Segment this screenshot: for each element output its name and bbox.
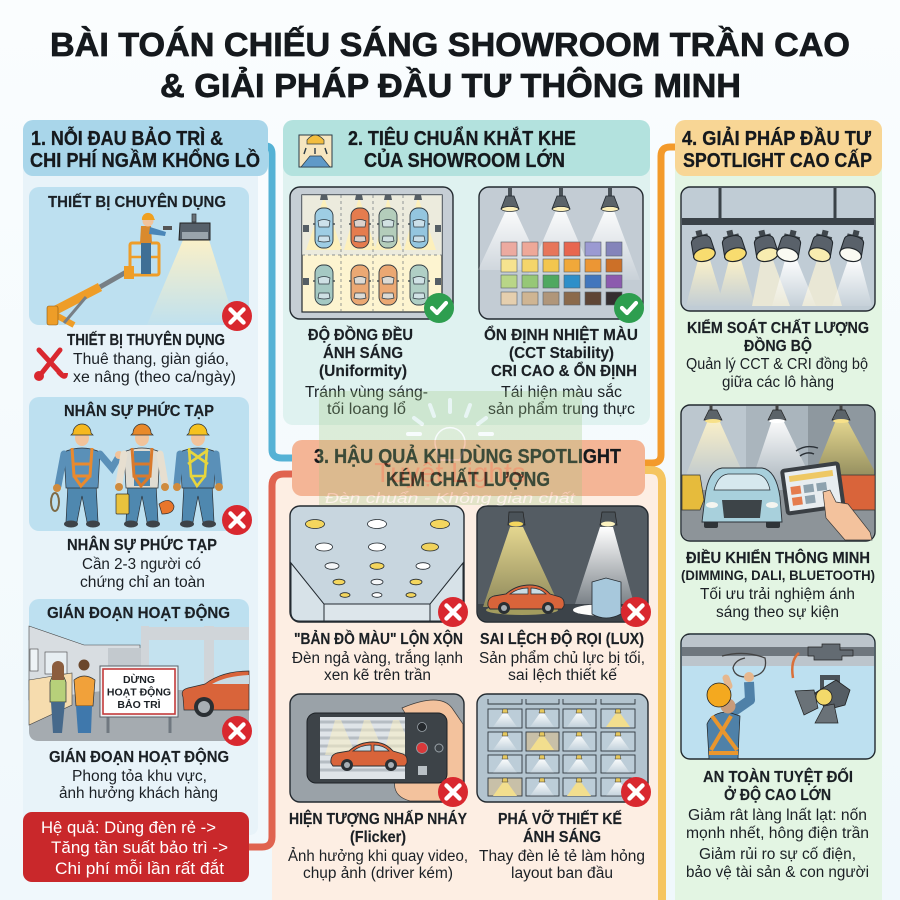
worker 3 (173, 424, 223, 528)
text: broken layout (479, 810, 645, 882)
text: colour stability: sản phẩm trung thực (488, 401, 635, 418)
worker 2 (115, 424, 174, 528)
text: broken layout: Thay đèn lẻ tẻ làm hỏng (479, 848, 645, 865)
panel 2 header (283, 120, 650, 176)
callout: consequence box (23, 812, 249, 882)
text: smart control: ĐIỀU KHIỂN THÔNG MINH (686, 549, 870, 567)
text: uniformity: tối loang lổ (327, 401, 406, 418)
watermark: Đèn chuẩn - Không gian chất (325, 490, 576, 507)
text: lux deviation: sai lệch thiết kế (508, 667, 617, 684)
panel 3 header: 3. HẬU QUẢ KHI DÙNG SPOTLIGHT (314, 444, 621, 468)
text: colour stability (484, 326, 638, 418)
title: & GIẢI PHÁP ĐẦU TƯ THÔNG MINH (160, 66, 741, 104)
text: uniformity (305, 326, 428, 418)
image: synchronised track spotlights (681, 187, 875, 311)
text: smart control: sáng theo sự kiện (716, 604, 839, 621)
panel 3 body with connector lines (249, 440, 662, 900)
image: mixed ceiling colours (290, 506, 468, 627)
image: lux deviation (477, 506, 651, 627)
badge: cross (621, 597, 651, 627)
panel 3 header (292, 440, 645, 496)
card: personnel illustration (29, 397, 252, 535)
panel 1 header (23, 120, 268, 176)
text: colour stability: (CCT Stability) (509, 345, 614, 362)
text: flicker: chụp ảnh (driver kém) (303, 865, 453, 882)
image: uniformity floor plan (290, 187, 454, 323)
text: personnel: Cần 2-3 người có (82, 556, 201, 573)
text: safety (686, 768, 869, 881)
text: disruption: GIÁN ĐOẠN HOẠT ĐỘNG (49, 748, 229, 766)
text: safety: Giảm rât làng lnất lạt: nốn (688, 807, 867, 824)
badge: cross (438, 597, 468, 627)
text: flicker: Ảnh hưởng khi quay video, (288, 848, 468, 865)
connector: panel 1 to panel 3 (blue) (262, 146, 296, 458)
callout: consequence box: Hệ quả: Dùng đèn rẻ -> (41, 818, 216, 837)
text: flicker: (Flicker) (350, 829, 406, 846)
text: personnel (67, 536, 217, 591)
connector: panel 3 to panel 4 (orange) (640, 147, 678, 463)
text: safety: Giảm rủi ro sự cố điện, (699, 846, 856, 863)
panel 2 header: CỦA SHOWROOM LỚN (364, 148, 565, 172)
panel 2 header: 2. TIÊU CHUẨN KHẮT KHE (348, 126, 576, 150)
text: flicker: HIỆN TƯỢNG NHẤP NHÁY (289, 810, 468, 828)
card: disruption illustration: DỪNG (123, 673, 155, 686)
text: disruption (49, 748, 229, 802)
badge: cross (438, 777, 468, 807)
text: mixed ceiling (292, 630, 463, 684)
image: broken lighting layout grid (477, 694, 651, 807)
badge: cross (222, 716, 252, 746)
text: safety: AN TOÀN TUYỆT ĐỐI (703, 768, 853, 786)
text: broken layout: PHÁ VỠ THIẾT KẾ (498, 810, 622, 828)
text: smart control (681, 549, 875, 621)
panel 4: premium spotlight solution (675, 120, 882, 900)
card: specialised equipment illustration: THIẾT BỊ CHUYÊN DỤNG (48, 193, 226, 211)
watermark (319, 391, 582, 507)
text: quality control: giữa các lô hàng (722, 374, 834, 391)
text: lux deviation: SAI LỆCH ĐỘ RỌI (LUX) (480, 630, 644, 648)
text: uniformity: (Uniformity) (319, 363, 407, 380)
worker 1 (51, 424, 123, 528)
title (50, 26, 850, 104)
text: equipment: Thuê thang, giàn giáo, (73, 351, 229, 368)
text: quality control: KIỂM SOÁT CHẤT LƯỢNG (687, 319, 869, 337)
panel 1: hidden costs (23, 120, 268, 835)
image: smart control with tablet (681, 405, 875, 541)
text: broken layout: layout ban đầu (511, 865, 613, 882)
panel 3 header: KÉM CHẤT LƯỢNG (386, 468, 550, 491)
image: colour stability swatches (478, 187, 644, 323)
text: disruption: Phong tỏa khu vực, (72, 768, 207, 785)
text: mixed ceiling: Đèn ngả vàng, trắng lạnh (292, 650, 463, 667)
image: safe installation at height (681, 634, 875, 759)
text: colour stability: CRI CAO & ỔN ĐỊNH (491, 362, 637, 380)
text: mixed ceiling: xen kẽ trên trần (324, 667, 431, 684)
badge: cross (621, 777, 651, 807)
text: flicker (288, 810, 468, 882)
panel 4 header: 4. GIẢI PHÁP ĐẦU TƯ (682, 127, 871, 150)
text: safety: bảo vệ tài sản & con người (686, 864, 869, 881)
card: specialised equipment illustration (29, 187, 252, 331)
text: smart control: (DIMMING, DALI, BLUETOOTH) (681, 568, 875, 583)
panel 4 header: SPOTLIGHT CAO CẤP (683, 149, 872, 172)
badge: cross (222, 301, 252, 331)
text: lux deviation: Sản phẩm chủ lực bị tối, (479, 650, 645, 667)
badge: check (614, 293, 644, 323)
text: personnel: chứng chỉ an toàn (80, 574, 205, 591)
text: personnel: NHÂN SỰ PHỨC TẠP (67, 536, 217, 554)
callout: consequence box: Chi phí mỗi lần rất đắt (55, 859, 224, 878)
card: disruption illustration: BẢO TRÌ (117, 698, 161, 711)
text: safety: Ở ĐỘ CAO LỚN (724, 786, 831, 804)
text: colour stability: ỔN ĐỊNH NHIỆT MÀU (484, 326, 638, 344)
callout: consequence box: Tăng tần suất bảo trì -> (51, 838, 228, 857)
text: uniformity: Tránh vùng sáng- (305, 384, 428, 401)
badge: check (424, 293, 454, 323)
text: disruption: ảnh hưởng khách hàng (59, 785, 218, 802)
card: disruption illustration: HOẠT ĐỘNG (107, 686, 171, 698)
text: broken layout: ÁNH SÁNG (523, 829, 601, 846)
text: quality control: Quản lý CCT & CRI đồng bộ (686, 356, 868, 373)
text: safety: mọnh nhết, hông điện trần (686, 825, 869, 842)
text: quality control (686, 319, 869, 391)
icon: crossed wrench (34, 350, 66, 381)
image: flicker on phone (290, 694, 468, 807)
text: colour stability: Tái hiện màu sắc (501, 384, 622, 401)
panel 2: strict standards (283, 120, 650, 425)
text: uniformity: ÁNH SÁNG (323, 345, 403, 362)
panel 1 header: 1. NỖI ĐAU BẢO TRÌ & (31, 126, 223, 150)
text: equipment: xe nâng (theo ca/ngày) (73, 369, 236, 386)
card: disruption illustration (29, 599, 252, 746)
card: personnel illustration: NHÂN SỰ PHỨC TẠP (64, 402, 214, 420)
panel 1 header: CHI PHÍ NGẦM KHỔNG LỒ (30, 148, 260, 172)
text: mixed ceiling: "BẢN ĐỒ MÀU" LỘN XỘN (294, 630, 463, 648)
text: smart control: Tối ưu trải nghiệm ánh (700, 586, 855, 603)
icon: showroom lamp (299, 135, 332, 167)
text: quality control: ĐỒNG BỘ (744, 337, 812, 355)
worker installing the fixture (707, 672, 754, 759)
card: disruption illustration: GIÁN ĐOẠN HOẠT ĐỘNG (47, 604, 230, 622)
title: BÀI TOÁN CHIẾU SÁNG SHOWROOM TRẦN CAO (50, 26, 850, 63)
text: equipment (67, 331, 236, 386)
panel 4 header (675, 120, 882, 176)
badge: cross (222, 505, 252, 535)
text: equipment: THIẾT BỊ THUYÊN DỤNG (67, 331, 225, 349)
text: uniformity: ĐỘ ĐỒNG ĐỀU (308, 326, 413, 344)
watermark: Tuyệt Lights (374, 457, 526, 488)
text: lux deviation (479, 630, 645, 684)
